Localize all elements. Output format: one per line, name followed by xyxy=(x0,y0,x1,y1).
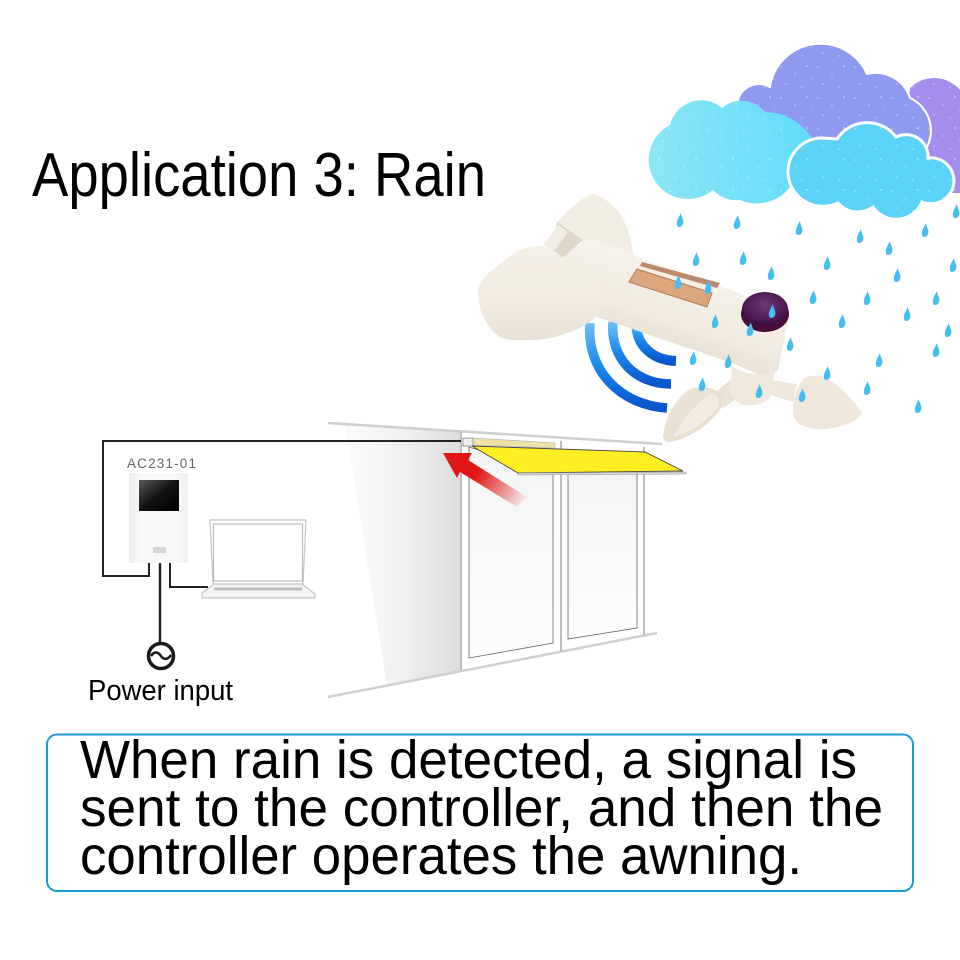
cloud: violet back right xyxy=(900,78,960,193)
window pane left xyxy=(469,447,553,658)
callout box xyxy=(47,730,913,891)
sensor: arm xyxy=(562,240,788,376)
red arrow xyxy=(443,453,527,507)
callout text xyxy=(80,730,883,886)
awning canopy xyxy=(472,446,683,473)
window frame xyxy=(461,432,644,670)
wiring xyxy=(103,441,461,645)
wall top line xyxy=(328,423,662,444)
sensor: cup arm right xyxy=(770,380,797,402)
title: Application 3: Rain xyxy=(32,141,486,210)
controller button xyxy=(153,547,166,553)
sensor: copper strip xyxy=(640,262,720,288)
callout text: controller operates the awning. xyxy=(80,826,802,886)
rain sensor xyxy=(478,194,862,442)
sensor: cup arm left xyxy=(718,380,742,408)
awning front bar xyxy=(518,472,686,475)
cloud: periwinkle back xyxy=(738,44,931,190)
sensor: back lobe xyxy=(557,194,633,256)
sensor: shadow wedge xyxy=(553,222,583,258)
signal waves xyxy=(590,318,676,408)
controller device xyxy=(129,473,188,563)
sensor: left cup inner xyxy=(673,393,719,437)
building with window and awning xyxy=(328,423,686,697)
raindrops xyxy=(675,204,959,413)
sensor: purple lens xyxy=(742,292,788,326)
sensor: copper grid xyxy=(629,269,712,307)
callout text: sent to the controller, and then the xyxy=(80,778,883,838)
awning bracket xyxy=(463,438,473,446)
sensor: left cup xyxy=(663,387,723,442)
controller body xyxy=(129,473,188,563)
controller screen xyxy=(139,480,179,511)
callout text: When rain is detected, a signal is xyxy=(80,730,857,790)
icon: power symbol xyxy=(148,644,174,668)
cloud: cyan front xyxy=(788,123,954,219)
wall bottom line xyxy=(328,633,657,697)
sensor: connector xyxy=(543,225,568,252)
cloud: light cyan left xyxy=(649,100,812,203)
clouds xyxy=(649,44,960,219)
sensor: right cup xyxy=(793,376,862,429)
sensor: stem xyxy=(730,366,775,406)
sensor: lens rim xyxy=(741,296,789,332)
wall shading xyxy=(345,425,460,685)
awning roller xyxy=(473,438,555,448)
power input label: Power input xyxy=(88,675,233,707)
controller label: AC231-01 xyxy=(127,456,196,471)
sensor: main lobe xyxy=(478,246,603,340)
window pane right xyxy=(568,473,637,639)
icon: laptop xyxy=(202,520,315,598)
